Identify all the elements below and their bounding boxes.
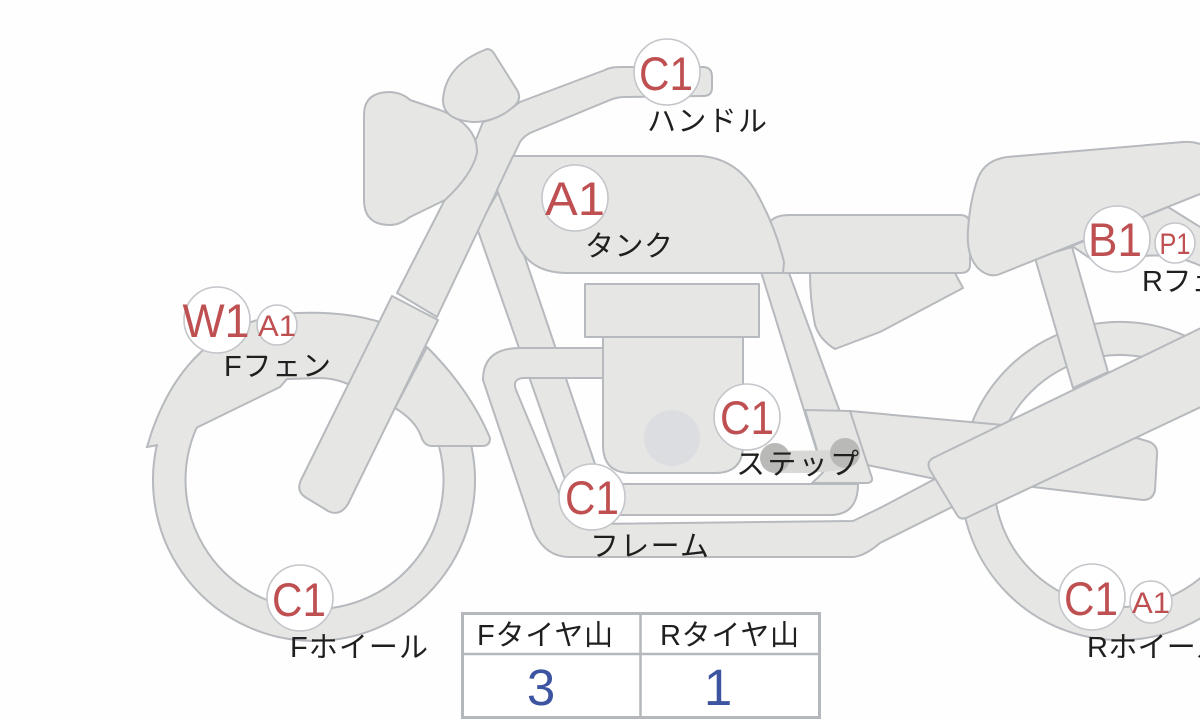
front wheel and fender: [147, 313, 490, 641]
label: step: ステップ: [736, 449, 859, 481]
meter: [443, 49, 519, 122]
upper exhaust pipe: [483, 348, 970, 557]
badge: handlebar C1: C1: [639, 47, 693, 100]
header: front tire tread: Fタイヤ山: [477, 620, 613, 652]
badge: rear wheel C1: C1: [1064, 572, 1118, 625]
headlight: [364, 92, 477, 225]
badge: rear fender P1: P1: [1160, 228, 1190, 261]
side cover: [810, 273, 963, 349]
badge: tank A1: [542, 165, 608, 231]
badge: rear wheel A1: A1: [1132, 587, 1170, 620]
fuel tank: [497, 156, 784, 273]
label: front wheel: Fホイール: [290, 632, 428, 664]
rear wheel: [961, 322, 1200, 640]
badge: front wheel C1: C1: [272, 573, 326, 626]
badge: rear wheel A1: [1130, 581, 1172, 623]
label: frame: フレーム: [590, 531, 709, 563]
label: tank: タンク: [585, 231, 673, 263]
rear frame tube: [758, 262, 840, 452]
badge: front fender A1: A1: [258, 310, 296, 343]
header: rear tire tread: Rタイヤ山: [660, 620, 799, 652]
badge: rear fender B1: [1084, 206, 1150, 272]
rear cowl: [968, 142, 1200, 275]
label: handlebar: ハンドル: [647, 106, 767, 138]
badge: rear fender B1: B1: [1088, 213, 1142, 266]
badge: step C1: C1: [720, 391, 774, 444]
seat: [770, 215, 970, 273]
frame down tube: [477, 187, 597, 485]
swingarm: [929, 326, 1200, 519]
rear shock: [1035, 247, 1108, 388]
value: front tread: 3: [527, 659, 555, 716]
lower exhaust pipe: [590, 484, 858, 515]
front fork and handlebar: [299, 67, 712, 513]
engine: [585, 284, 759, 473]
step: [760, 438, 860, 473]
badge: front fender W1: W1: [182, 294, 250, 347]
badge: tank A1: A1: [545, 172, 605, 225]
tire tread table: [462, 613, 820, 718]
label: front fender: Fフェン: [224, 351, 331, 383]
rear fender: [1072, 207, 1200, 268]
badge: frame C1: C1: [565, 471, 619, 524]
value: rear tread: 1: [704, 659, 732, 716]
rear block: [1033, 438, 1157, 500]
swingarm plate: [805, 410, 1012, 484]
